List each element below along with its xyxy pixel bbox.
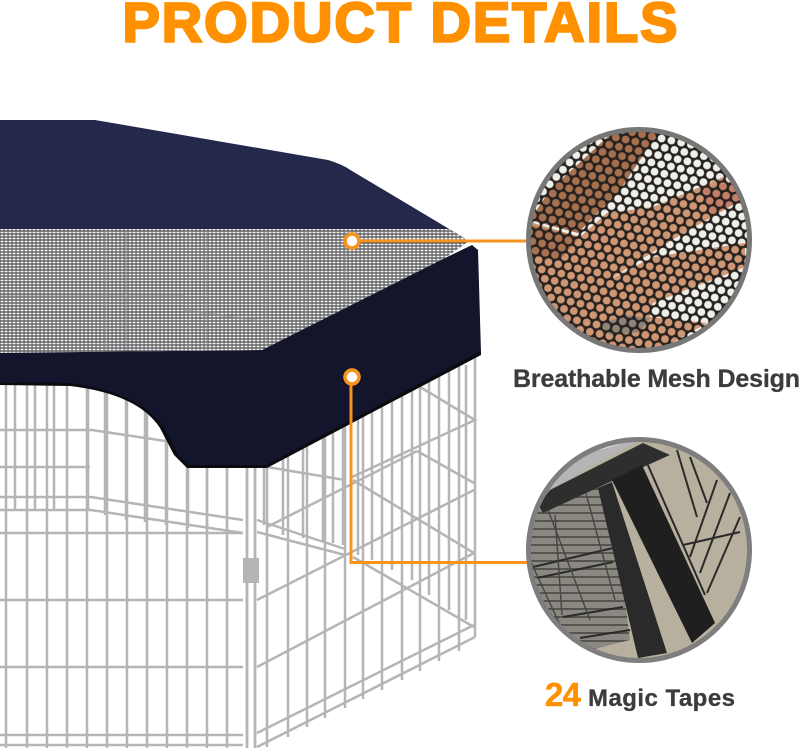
fingers [530,130,660,233]
tape strap rear [598,482,667,658]
label: breathable mesh design: Breathable Mesh Design [513,365,800,393]
text magic tapes: Magic Tapes [588,685,735,712]
cover skirt [0,245,481,467]
door clamp [243,558,259,583]
ring [528,130,750,350]
thin cage wires [530,490,615,625]
cover top panel [0,120,466,239]
wires seen through mesh [0,231,345,351]
wire pet playpen [0,355,475,748]
callout: mesh leader line [345,234,527,248]
callout: tape leader line [345,370,527,562]
cage wires [533,450,740,638]
number 24: 24 [545,676,582,713]
mesh cover [0,120,481,468]
detail circle: magic tapes [525,436,755,666]
ring [528,440,750,660]
right panel wires [267,355,475,747]
skirt hem [0,351,481,468]
elastic band [538,443,670,513]
silver roof [550,442,636,489]
detail circle: breathable mesh [526,127,752,353]
marker [345,234,359,248]
mesh window [0,229,469,353]
net [531,132,747,348]
back panels wires [15,365,466,620]
left cage [525,483,630,650]
front panel wires [6,370,227,748]
marker [345,370,359,384]
tape strap front [612,465,715,643]
label: 24 magic tapes [545,676,735,713]
